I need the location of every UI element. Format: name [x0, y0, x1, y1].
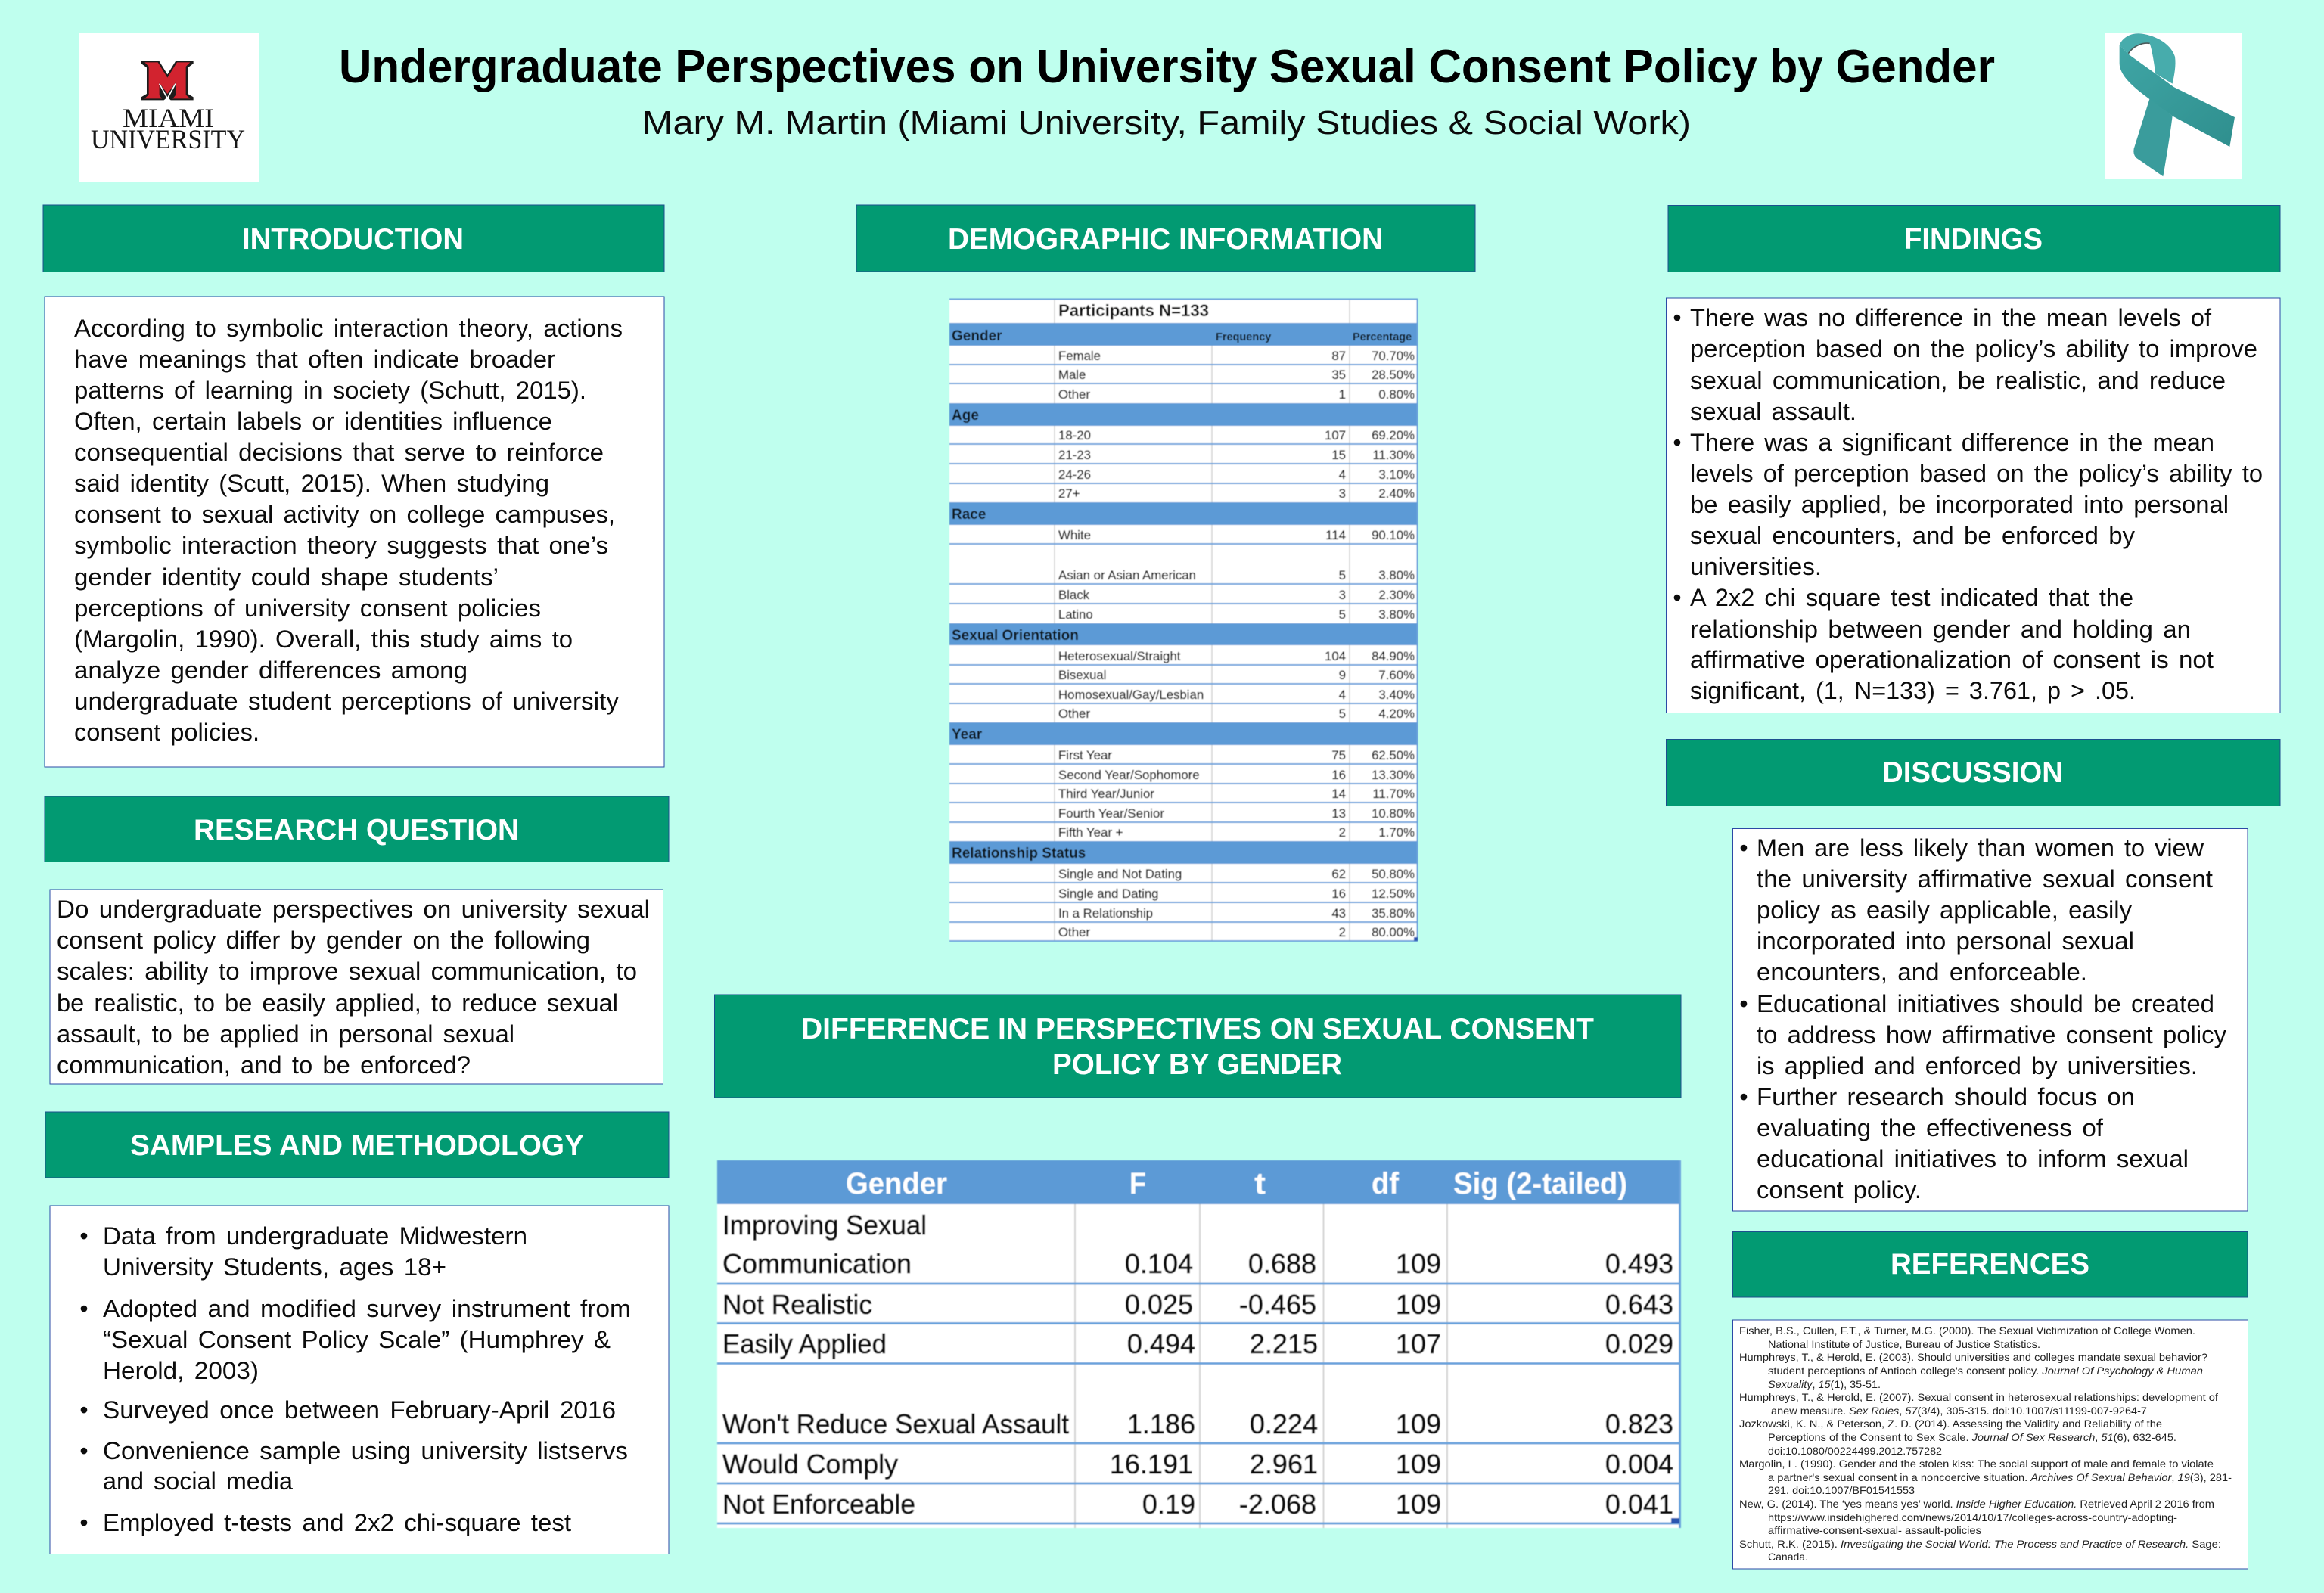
panel: discussion list: policy as easily applicable, easily	[1757, 896, 2132, 924]
panel: samples and methodology list: Herold, 2003)	[103, 1357, 259, 1384]
table: participant demographics: 5	[1339, 706, 1346, 721]
table: participant demographics: Bisexual	[1058, 668, 1106, 682]
panel: discussion list: incorporated into personal sexual	[1757, 927, 2134, 955]
table: participant demographics: 80.00%	[1372, 925, 1415, 939]
panel: findings list: There was no difference in the mean levels of	[1690, 304, 2211, 331]
panel: samples and methodology list: •	[79, 1437, 89, 1464]
panel: findings list: sexual assault.	[1690, 398, 1856, 425]
panel: reference list: a partner's sexual consent in a noncoercive situation. Archives Of Sexual Behavior , 19(3), 281-	[1768, 1471, 2232, 1483]
panel: introduction text: analyze gender differences among	[74, 657, 468, 684]
table: t-test results by gender: df	[1372, 1167, 1400, 1200]
table: participant demographics: 1.70%	[1378, 825, 1415, 840]
panel: reference list: Humphreys, T., & Herold, E. (2003). Should universities and colleges mandate sexual behavior?	[1739, 1351, 2207, 1363]
table: t-test results by gender: 0.494	[1127, 1328, 1195, 1359]
panel: findings list: sexual communication, be realistic, and reduce	[1690, 367, 2226, 394]
heading: findings: FINDINGS	[1904, 223, 2043, 256]
table: participant demographics: Other	[1058, 387, 1090, 402]
heading: findings	[1668, 206, 2280, 272]
table: participant demographics: 10.80%	[1372, 806, 1415, 821]
panel: samples and methodology list: Convenience sample using university listservs	[103, 1437, 628, 1464]
panel: findings list: affirmative operationalization of consent is not	[1690, 646, 2214, 673]
panel: reference list: New, G. (2014). The ‘yes means yes’ world. Inside Higher Education. Retrieved April 2 2016 from	[1739, 1498, 2214, 1510]
heading: demographic information	[856, 205, 1475, 272]
table: participant demographics: Heterosexual/Straight	[1058, 649, 1181, 663]
table: participant demographics: 75	[1331, 748, 1346, 762]
panel: reference list: Sexuality, 15(1), 35-51.	[1768, 1378, 1881, 1390]
table: participant demographics: 16	[1331, 768, 1346, 782]
panel: research question text: consent policy differ by gender on the following	[57, 927, 590, 954]
panel: introduction text: have meanings that often indicate broader	[74, 346, 555, 373]
table: participant demographics: 11.30%	[1372, 448, 1415, 462]
panel: introduction text: symbolic interaction theory suggests that one’s	[74, 532, 608, 559]
table: t-test results by gender: 0.224	[1250, 1408, 1318, 1439]
table: participant demographics: Other	[1058, 925, 1090, 939]
panel: findings list: There was a significant difference in the mean	[1690, 429, 2214, 456]
table: participant demographics: 50.80%	[1372, 867, 1415, 881]
panel: reference list: Schutt, R.K. (2015). Investigating the Social World: The Process and Practice of Research. Sage:	[1739, 1538, 2221, 1550]
panel: discussion list: •	[1739, 990, 1748, 1017]
panel: research question text: scales: ability to improve sexual communication, to	[57, 958, 637, 985]
panel: introduction text: perceptions of university consent policies	[74, 595, 541, 622]
table: participant demographics: Race	[952, 507, 986, 523]
panel: samples and methodology list: •	[79, 1222, 89, 1250]
table: t-test results by gender: 0.688	[1248, 1248, 1316, 1279]
panel: discussion list: Men are less likely than women to view	[1757, 834, 2204, 862]
panel: introduction text: Often, certain labels or identities influence	[74, 408, 552, 435]
table: participant demographics: 43	[1331, 906, 1346, 921]
panel: reference list: student perceptions of Antioch college's consent policy. Journal Of Psychology & Human	[1768, 1365, 2203, 1377]
panel: discussion list: •	[1739, 1083, 1748, 1110]
logo: Miami University: MIAMI	[123, 103, 214, 133]
table: participant demographics: 70.70%	[1372, 349, 1415, 363]
table: participant demographics: 2	[1339, 825, 1346, 840]
table: participant demographics: Homosexual/Gay/Lesbian	[1058, 688, 1204, 702]
panel: findings list: A 2x2 chi square test indicated that the	[1690, 584, 2133, 611]
panel: samples and methodology list: Surveyed once between February-April 2016	[103, 1396, 616, 1424]
table: participant demographics: 5	[1339, 607, 1346, 622]
panel: research question text: Do undergraduate perspectives on university sexual	[57, 896, 650, 923]
heading: introduction: INTRODUCTION	[242, 223, 464, 256]
panel: introduction text: undergraduate student perceptions of university	[74, 688, 619, 715]
table: participant demographics: 35	[1331, 368, 1346, 382]
table: t-test results by gender: 109	[1396, 1449, 1441, 1480]
table: participant demographics: 18-20	[1058, 428, 1091, 442]
panel: discussion list: •	[1739, 834, 1748, 862]
table: participant demographics: 3.40%	[1378, 688, 1415, 702]
panel: samples and methodology list: •	[79, 1396, 89, 1424]
table: participant demographics: 27+	[1058, 486, 1080, 501]
table: t-test results by gender: 109	[1396, 1489, 1441, 1520]
table: participant demographics: 13	[1331, 806, 1346, 821]
panel: samples and methodology list: •	[79, 1295, 89, 1322]
table: participant demographics: Relationship Status	[952, 846, 1086, 862]
table: participant demographics: 11.70%	[1372, 787, 1415, 801]
table: participant demographics: 4.20%	[1378, 706, 1415, 721]
table: participant demographics: 28.50%	[1372, 368, 1415, 382]
heading: discussion: DISCUSSION	[1882, 756, 2063, 789]
table: t-test results by gender	[717, 1160, 1680, 1528]
table: participant demographics: 16	[1331, 887, 1346, 901]
table: participant demographics: Participants N=133	[1058, 301, 1209, 320]
panel: discussion list: consent policy.	[1757, 1176, 1922, 1203]
table: participant demographics: 14	[1331, 787, 1346, 801]
panel: introduction text: (Margolin, 1990). Overall, this study aims to	[74, 626, 573, 653]
table: t-test results by gender: 2.961	[1250, 1449, 1318, 1480]
panel: reference list: doi:10.1080/00224499.2012.757282	[1768, 1445, 1942, 1457]
table: t-test results by gender: F	[1129, 1167, 1146, 1200]
table: participant demographics: 69.20%	[1372, 428, 1415, 442]
table: participant demographics: 3	[1339, 588, 1346, 602]
panel: introduction text: According to symbolic interaction theory, actions	[74, 315, 623, 342]
table: participant demographics: 3.80%	[1378, 607, 1415, 622]
panel: introduction text: consequential decisions that serve to reinforce	[74, 439, 604, 466]
table: participant demographics: Asian or Asian American	[1058, 568, 1196, 582]
panel: reference list: Perceptions of the Consent to Sex Scale. Journal Of Sex Research , 51(6), 632-645.	[1768, 1431, 2176, 1443]
table: participant demographics: Third Year/Junior	[1058, 787, 1154, 801]
table: t-test results by gender: -0.465	[1239, 1289, 1316, 1320]
panel: findings list: •	[1673, 304, 1682, 331]
table: participant demographics: 0.80%	[1378, 387, 1415, 402]
panel: reference list: anew measure. Sex Roles, 57(3/4), 305-315. doi:10.1007/s11199-007-9264-7	[1771, 1405, 2147, 1417]
heading: difference in perspectives: POLICY BY GENDER	[1052, 1048, 1342, 1081]
table: participant demographics: 3	[1339, 486, 1346, 501]
icon: teal awareness ribbon	[2105, 33, 2242, 179]
table: participant demographics: 62	[1331, 867, 1346, 881]
panel: reference list: 291. doi:10.1007/BF01541553	[1768, 1484, 1915, 1496]
table: t-test results by gender: Gender	[846, 1167, 947, 1200]
table: t-test results by gender: Sig (2-tailed)	[1453, 1167, 1627, 1200]
panel: findings list: •	[1673, 429, 1682, 456]
panel: discussion list: encounters, and enforceable.	[1757, 958, 2087, 986]
table: t-test results by gender: 109	[1396, 1289, 1441, 1320]
panel: introduction text	[45, 297, 664, 767]
table: participant demographics: 21-23	[1058, 448, 1091, 462]
panel: discussion list: Educational initiatives should be created	[1757, 990, 2214, 1017]
table: participant demographics: 104	[1325, 649, 1346, 663]
panel: reference list: Humphreys, T., & Herold, E. (2007). Sexual consent in heterosexual relationships: development of	[1739, 1391, 2218, 1403]
heading: difference in perspectives	[714, 995, 1681, 1098]
table: participant demographics: 4	[1339, 688, 1346, 702]
panel: samples and methodology list: University Students, ages 18+	[103, 1253, 446, 1281]
table: t-test results by gender: 0.643	[1605, 1289, 1673, 1320]
table: participant demographics: Fifth Year +	[1058, 825, 1123, 840]
table: participant demographics: Male	[1058, 368, 1086, 382]
panel: findings list: perception based on the policy’s ability to improve	[1690, 335, 2257, 362]
table: participant demographics: Sexual Orientation	[952, 628, 1079, 644]
heading: research question: RESEARCH QUESTION	[194, 814, 519, 846]
table: t-test results by gender: -2.068	[1239, 1489, 1316, 1520]
panel: findings list: sexual encounters, and be enforced by	[1690, 522, 2135, 549]
table: participant demographics: Single and Dating	[1058, 887, 1158, 901]
table: participant demographics: 107	[1325, 428, 1346, 442]
title: Undergraduate Perspectives on University Sexual Consent Policy by Gender	[339, 41, 1995, 93]
panel: introduction text: patterns of learning in society (Schutt, 2015).	[74, 377, 586, 404]
logo: Miami University	[79, 33, 259, 182]
table: t-test results by gender: 0.493	[1605, 1248, 1673, 1279]
panel: samples and methodology list: and social media	[103, 1467, 293, 1495]
table: t-test results by gender: 16.191	[1110, 1449, 1193, 1480]
panel: findings list: significant, (1, N=133) = 3.761, p > .05.	[1690, 677, 2136, 704]
table: participant demographics: 13.30%	[1372, 768, 1415, 782]
table: t-test results by gender: 0.025	[1125, 1289, 1193, 1320]
table: participant demographics: 84.90%	[1372, 649, 1415, 663]
table: participant demographics: 3.80%	[1378, 568, 1415, 582]
panel: discussion list: educational initiatives to inform sexual	[1757, 1145, 2189, 1172]
panel: introduction text: gender identity could shape students’	[74, 564, 499, 591]
panel: samples and methodology list	[50, 1206, 669, 1554]
heading: demographic information: DEMOGRAPHIC INFORMATION	[948, 223, 1383, 256]
panel: findings list: levels of perception based on the policy’s ability to	[1690, 460, 2263, 487]
heading: difference in perspectives: DIFFERENCE IN PERSPECTIVES ON SEXUAL CONSENT	[801, 1013, 1594, 1045]
table: participant demographics: 4	[1339, 467, 1346, 482]
table: participant demographics: Gender	[952, 328, 1002, 344]
panel: findings list: •	[1673, 584, 1682, 611]
table: participant demographics: 35.80%	[1372, 906, 1415, 921]
table: t-test results by gender: Not Enforceable	[722, 1489, 915, 1520]
logo: Miami University: UNIVERSITY	[91, 124, 245, 154]
panel: samples and methodology list: “Sexual Consent Policy Scale” (Humphrey &	[103, 1326, 611, 1353]
heading: discussion	[1666, 740, 2280, 806]
panel: discussion list: the university affirmative sexual consent	[1757, 865, 2213, 893]
table: participant demographics: 12.50%	[1372, 887, 1415, 901]
table: participant demographics: 5	[1339, 568, 1346, 582]
panel: research question text: communication, and to be enforced?	[57, 1051, 471, 1079]
table: t-test results by gender: 0.041	[1605, 1489, 1673, 1520]
table: participant demographics: 62.50%	[1372, 748, 1415, 762]
table: t-test results by gender: 0.19	[1142, 1489, 1195, 1520]
heading: samples and methodology	[45, 1112, 669, 1178]
icon: red block M	[141, 61, 194, 100]
table: participant demographics: 114	[1325, 528, 1346, 542]
panel: findings list: relationship between gender and holding an	[1690, 616, 2191, 643]
table: participant demographics: Second Year/Sophomore	[1058, 768, 1200, 782]
table: participant demographics: 1	[1339, 387, 1346, 402]
table: participant demographics: 7.60%	[1378, 668, 1415, 682]
panel: research question text: assault, to be applied in personal sexual	[57, 1020, 514, 1048]
table: participant demographics: Female	[1058, 349, 1101, 363]
heading: samples and methodology: SAMPLES AND METHODOLOGY	[130, 1129, 584, 1162]
table: t-test results by gender: Communication	[722, 1248, 912, 1279]
panel: findings list: universities.	[1690, 553, 1822, 580]
panel: discussion list: evaluating the effectiveness of	[1757, 1114, 2103, 1141]
table: participant demographics: 90.10%	[1372, 528, 1415, 542]
table: participant demographics: 87	[1331, 349, 1346, 363]
panel: samples and methodology list: Employed t-tests and 2x2 chi-square test	[103, 1509, 571, 1536]
table: participant demographics: Latino	[1058, 607, 1093, 622]
table: t-test results by gender: 109	[1396, 1408, 1441, 1439]
heading: references: REFERENCES	[1891, 1248, 2089, 1281]
table: participant demographics: Age	[952, 408, 979, 424]
table: t-test results by gender: 0.029	[1605, 1328, 1673, 1359]
table: participant demographics: In a Relationship	[1058, 906, 1153, 921]
table: t-test results by gender: 1.186	[1127, 1408, 1195, 1439]
panel: reference list: Canada.	[1768, 1551, 1808, 1563]
panel: introduction text: consent to sexual activity on college campuses,	[74, 501, 615, 528]
panel: discussion list: is applied and enforced by universities.	[1757, 1052, 2198, 1079]
table: participant demographics: Black	[1058, 588, 1090, 602]
panel: samples and methodology list: Data from undergraduate Midwestern	[103, 1222, 527, 1250]
table: participant demographics: First Year	[1058, 748, 1112, 762]
panel: discussion list: Further research should focus on	[1757, 1083, 2135, 1110]
table: t-test results by gender: Easily Applied	[722, 1328, 887, 1359]
table: t-test results by gender: Won't Reduce Sexual Assault	[722, 1408, 1069, 1439]
panel: discussion list: to address how affirmative consent policy	[1757, 1021, 2226, 1048]
panel: research question text: be realistic, to be easily applied, to reduce sexual	[57, 989, 618, 1017]
table: participant demographics	[949, 299, 1418, 941]
table: participant demographics: 15	[1331, 448, 1346, 462]
panel: reference list: affirmative-consent-sexual- assault-policies	[1768, 1524, 1981, 1536]
panel: findings list: be easily applied, be incorporated into personal	[1690, 491, 2229, 518]
panel: samples and methodology list: Adopted and modified survey instrument from	[103, 1295, 631, 1322]
panel: reference list: https://www.insidehighered.com/news/2014/10/17/colleges-across-country-adopting-	[1768, 1511, 2177, 1523]
panel: introduction text: said identity (Scutt, 2015). When studying	[74, 470, 549, 497]
panel: introduction text: consent policies.	[74, 719, 259, 746]
table: participant demographics: Frequency	[1216, 331, 1271, 343]
table: participant demographics: White	[1058, 528, 1091, 542]
table: participant demographics: 9	[1339, 668, 1346, 682]
table: t-test results by gender: 0.004	[1605, 1449, 1673, 1480]
table: participant demographics: Other	[1058, 706, 1090, 721]
panel: samples and methodology list: •	[79, 1509, 89, 1536]
table: t-test results by gender: 0.823	[1605, 1408, 1673, 1439]
table: t-test results by gender: 0.104	[1125, 1248, 1193, 1279]
table: participant demographics: 3.10%	[1378, 467, 1415, 482]
panel: reference list	[1732, 1320, 2248, 1569]
table: participant demographics: 2.40%	[1378, 486, 1415, 501]
table: participant demographics: Fourth Year/Senior	[1058, 806, 1164, 821]
table: t-test results by gender: Improving Sexual	[722, 1210, 927, 1241]
table: participant demographics: Year	[952, 727, 983, 743]
table: participant demographics: 2	[1339, 925, 1346, 939]
panel: discussion list	[1732, 829, 2248, 1211]
table: t-test results by gender: 109	[1396, 1248, 1441, 1279]
table: t-test results by gender: Would Comply	[722, 1449, 898, 1480]
panel: reference list: Margolin, L. (1990). Gender and the stolen kiss: The social support of male and female to violate	[1739, 1458, 2214, 1470]
panel: reference list: Fisher, B.S., Cullen, F.T., & Turner, M.G. (2000). The Sexual Victimization of College Women.	[1739, 1324, 2195, 1337]
table: t-test results by gender: t	[1254, 1167, 1266, 1200]
table: participant demographics: 24-26	[1058, 467, 1091, 482]
table: participant demographics: Percentage	[1353, 331, 1412, 343]
heading: introduction	[43, 205, 664, 272]
author line: Mary M. Martin (Miami University, Family Studies & Social Work)	[642, 104, 1691, 141]
table: participant demographics: Single and Not Dating	[1058, 867, 1182, 881]
heading: references	[1732, 1231, 2248, 1297]
heading: research question	[45, 796, 669, 862]
table: participant demographics: 2.30%	[1378, 588, 1415, 602]
table: t-test results by gender: 2.215	[1250, 1328, 1318, 1359]
table: t-test results by gender: 107	[1396, 1328, 1441, 1359]
panel: research question text	[50, 890, 663, 1084]
panel: findings list	[1666, 298, 2280, 713]
panel: reference list: Jozkowski, K. N., & Peterson, Z. D. (2014). Assessing the Validity and Reliability of the	[1739, 1418, 2162, 1430]
table: t-test results by gender: Not Realistic	[722, 1289, 872, 1320]
panel: reference list: National Institute of Justice, Bureau of Justice Statistics.	[1768, 1338, 2040, 1350]
